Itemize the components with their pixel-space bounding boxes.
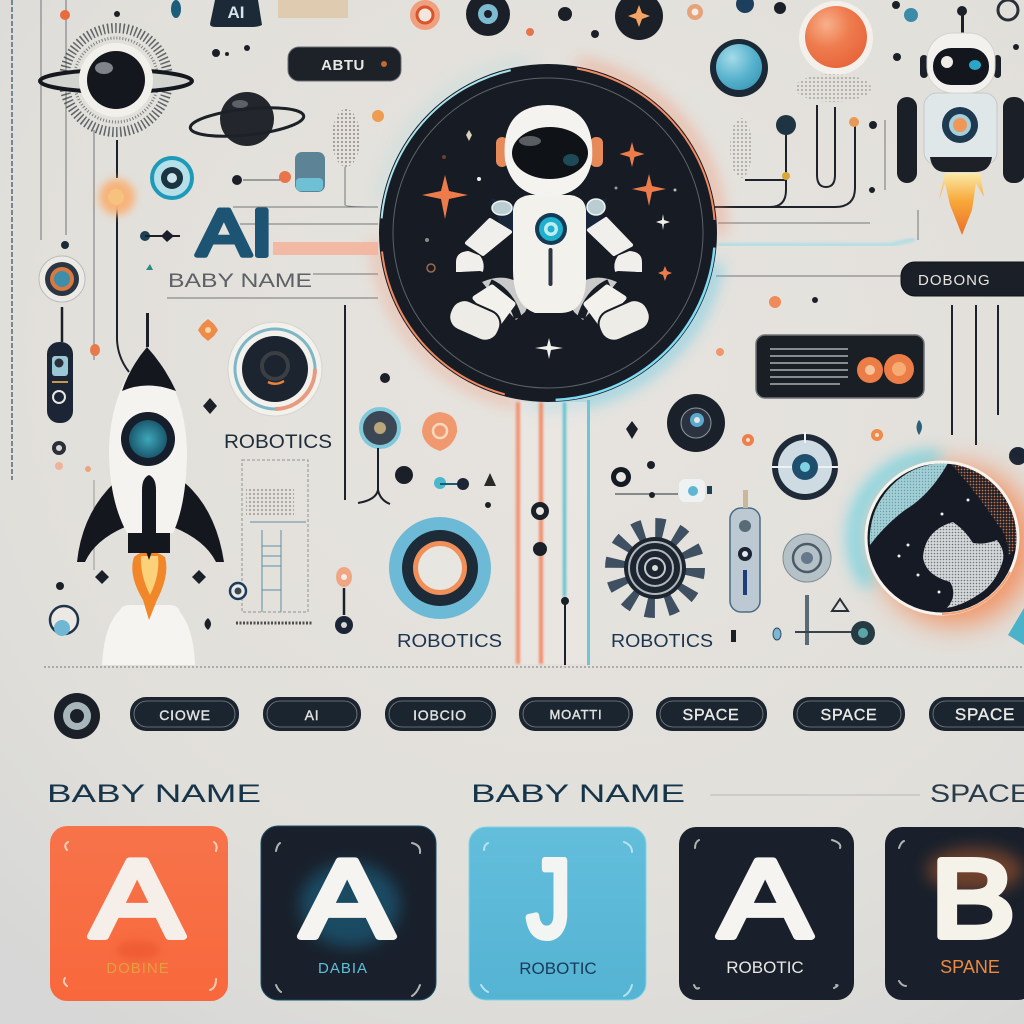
small rocket side marks xyxy=(56,319,390,630)
card: dark B space: B xyxy=(931,838,1015,960)
card: dark B space: SPANE xyxy=(940,957,1000,977)
middle small icons xyxy=(358,409,496,508)
label ABTU: ABTU xyxy=(321,57,365,74)
card: orange A xyxy=(50,1,228,1001)
tag AI xyxy=(263,697,361,731)
panel device xyxy=(756,335,924,398)
saturn icon xyxy=(189,92,305,146)
card: orange A: DOBINE xyxy=(106,960,170,977)
card: blue J: ROBOTIC xyxy=(519,959,597,978)
robot with rocket thrust xyxy=(897,6,1024,235)
small top icons xyxy=(60,0,1019,61)
tag SPACE xyxy=(656,697,767,731)
blue orb xyxy=(710,39,768,97)
label DOBONG xyxy=(901,262,1024,296)
label ROBOTICS middle: ROBOTICS xyxy=(397,631,502,651)
top tag AI: AI xyxy=(228,3,244,22)
planet glow cyan xyxy=(855,458,940,585)
small pin icon xyxy=(335,567,353,634)
lens icon xyxy=(783,534,831,582)
dark wires xyxy=(12,0,998,500)
right arm xyxy=(583,198,639,272)
glow behind main circle xyxy=(350,35,746,431)
tag IOBCIO: IOBCIO xyxy=(413,707,467,723)
card: blue J: J xyxy=(527,838,571,960)
tag SPACE: SPACE xyxy=(682,707,740,724)
heading BABY NAME center: BABY NAME xyxy=(471,780,685,808)
card: dark A robotic: ROBOTIC xyxy=(726,958,804,977)
tag CIOWE: CIOWE xyxy=(159,707,211,723)
blueprint tower xyxy=(236,460,312,623)
card: dark A robotic xyxy=(679,827,854,1000)
card: dark A xyxy=(261,826,436,1000)
tag SPACE: SPACE xyxy=(955,705,1015,724)
orbit icon left xyxy=(39,256,85,302)
wire nodes xyxy=(776,115,877,193)
card: dark A robotic: A xyxy=(719,838,812,960)
label ROBOTICS left: ROBOTICS xyxy=(224,432,332,453)
pill device left xyxy=(47,307,100,570)
astronaut xyxy=(445,105,654,345)
tag MOATTI xyxy=(519,697,633,731)
thin guide lines xyxy=(41,0,1024,795)
row of pill tags xyxy=(54,693,1024,739)
orange orb xyxy=(795,1,873,102)
top tag AI xyxy=(210,0,262,27)
label ROBOTICS right: ROBOTICS xyxy=(611,631,713,651)
stars xyxy=(422,130,676,359)
label ABTU xyxy=(288,47,401,81)
AI heading: AI xyxy=(197,196,273,270)
target ring small xyxy=(230,583,246,599)
card: orange A: A xyxy=(91,838,184,960)
small bottom-right icons xyxy=(731,595,1024,645)
left blue shield icon xyxy=(50,606,78,636)
small center-right icons xyxy=(611,296,1024,502)
right leg xyxy=(571,278,654,345)
camera icon xyxy=(667,394,725,452)
target badge icon xyxy=(772,432,838,500)
heading BABY NAME left: BABY NAME xyxy=(47,780,261,808)
tag MOATTI: MOATTI xyxy=(550,707,602,722)
left arm xyxy=(459,198,515,272)
card: dark A: DABIA xyxy=(318,960,368,977)
tag SPACE: SPACE xyxy=(820,707,878,724)
capsule device xyxy=(730,490,760,612)
tag AI: AI xyxy=(305,707,319,723)
small left icons xyxy=(61,109,384,270)
planet glow orange xyxy=(875,465,1024,625)
gear ring icon xyxy=(389,517,491,619)
heading SPACE right: SPACE xyxy=(930,780,1024,808)
earth globe xyxy=(866,462,1018,614)
AI heading xyxy=(197,196,378,270)
robotics eye icon xyxy=(228,322,322,416)
sun gear icon xyxy=(615,528,695,608)
BABY NAME small heading: BABY NAME xyxy=(168,271,312,292)
tag SPACE xyxy=(793,697,905,731)
tag SPACE xyxy=(929,697,1024,731)
planet with ring icon xyxy=(40,28,192,132)
central astronaut badge xyxy=(343,28,753,438)
card: dark A: A xyxy=(301,838,394,960)
card: blue J xyxy=(469,827,646,1000)
tag CIOWE xyxy=(130,697,239,731)
cyan light streak xyxy=(718,239,915,245)
card: dark B space xyxy=(885,827,1024,1000)
tag IOBCIO xyxy=(385,697,496,731)
round tag icon xyxy=(54,693,100,739)
left leg xyxy=(445,278,528,345)
vertical accent bars below badge xyxy=(516,400,590,665)
dotted oval xyxy=(730,118,752,178)
label DOBONG: DOBONG xyxy=(918,272,991,289)
rocket xyxy=(77,313,224,665)
